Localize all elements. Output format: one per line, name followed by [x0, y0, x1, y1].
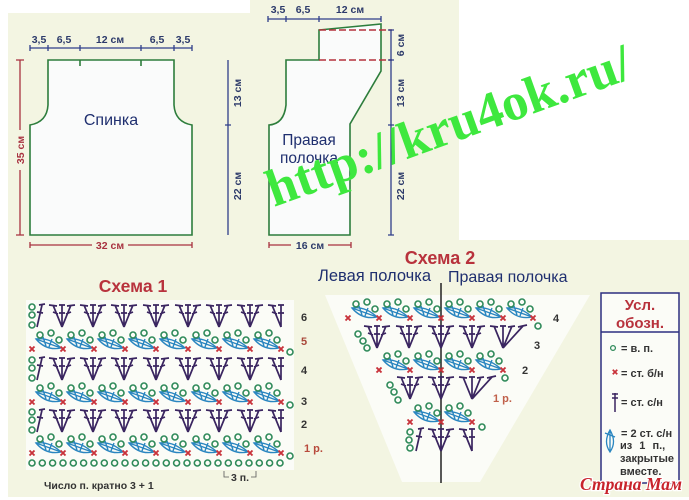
schema 1 title: Схема 1: [99, 276, 168, 296]
legend box: [601, 293, 679, 483]
row numbers: 1 р.: [493, 393, 512, 405]
multiple note: Число п. кратно 3 + 1: [44, 480, 154, 492]
row numbers: 6: [301, 312, 307, 324]
watermark: site name: Страна Мам: [580, 474, 682, 494]
middle height dimension: [225, 60, 244, 235]
legend: double crochet: = ст. с/н: [621, 397, 663, 409]
white backing: schema 1: [26, 300, 294, 470]
repeat bracket: [224, 471, 256, 484]
middle height dimension: 13 см: [232, 79, 244, 107]
back top dimensions: 3,5: [32, 34, 46, 46]
legend: cluster: [605, 428, 674, 478]
legend: cluster: из 1 п.,: [620, 440, 665, 452]
front top dimensions: [268, 4, 381, 22]
panel: right front pattern: [225, 4, 407, 252]
legend: cluster: закрытые: [620, 453, 674, 465]
legend: cluster: вместе.: [620, 466, 661, 478]
centre line: [440, 283, 442, 483]
back width dimension: 32 см: [96, 240, 124, 252]
white backing: schema 2: [325, 295, 590, 482]
front width dimension: [269, 240, 351, 252]
row 4 stitches: [29, 357, 284, 381]
row numbers: 4: [301, 365, 308, 377]
front height dimension: 13 см: [395, 79, 407, 107]
front outline: [269, 24, 381, 235]
back outline: [30, 60, 192, 235]
back label: Спинка: [84, 112, 138, 129]
back top dimensions: [30, 34, 192, 51]
row numbers: 2: [301, 419, 307, 431]
front height dimension: 6 см: [395, 34, 407, 56]
panel: back pattern: [15, 34, 192, 252]
repeat bracket: 3 п.: [231, 472, 249, 484]
back height dimension: 35 см: [15, 136, 27, 164]
front height dimension: [388, 30, 407, 235]
foundation chain: [29, 460, 283, 466]
row numbers: [493, 313, 560, 405]
front top dimensions: 3,5: [271, 4, 285, 16]
row numbers: 5: [301, 336, 307, 348]
front width dimension: 16 см: [296, 240, 324, 252]
watermark: url: http://kru4ok.ru/: [258, 33, 640, 218]
left front heading: Левая полочка: [318, 267, 432, 285]
panel: legend: [601, 293, 679, 483]
legend: cluster: = 2 ст. с/н: [621, 428, 672, 440]
row 5 stitches: [30, 330, 293, 355]
legend title: Усл.: [625, 297, 655, 314]
front top dimensions: 12 см: [336, 4, 364, 16]
row 1 stitches: [30, 434, 293, 459]
front label line 2: полочка: [280, 150, 338, 167]
middle height dimension: 22 см: [232, 172, 244, 200]
legend title line 2: обозн.: [616, 315, 664, 332]
row numbers: 4: [553, 313, 560, 325]
row numbers: 1 р.: [304, 443, 323, 455]
front height dimension: 22 см: [395, 172, 407, 200]
red dashed lines: [319, 30, 392, 60]
row 2 stitches: [29, 409, 284, 433]
back top dimensions: 6,5: [150, 34, 164, 46]
row numbers: [301, 312, 323, 455]
front label: Правая: [282, 132, 336, 149]
row numbers: 2: [522, 365, 528, 377]
legend: double crochet: [612, 393, 663, 412]
schema 2 title: Схема 2: [405, 248, 475, 268]
row 6 stitches: [29, 304, 284, 328]
row 4: [346, 299, 541, 329]
back width dimension: [30, 240, 192, 252]
back top dimensions: 12 см: [96, 34, 124, 46]
back top dimensions: 6,5: [57, 34, 71, 46]
lower stitch row: [406, 428, 475, 451]
legend: chain: = в. п.: [621, 343, 653, 355]
row 3: [355, 325, 527, 351]
row 3 stitches: [30, 383, 293, 408]
right front heading: Правая полочка: [448, 269, 568, 286]
panel: schema 1: [29, 276, 323, 492]
lower fan row: [408, 403, 485, 430]
legend: single crochet: = ст. б/н: [621, 368, 664, 380]
row 1: [387, 376, 496, 403]
back top dimensions: 3,5: [176, 34, 190, 46]
panel: schema 2: [318, 248, 568, 483]
back neck marks: [80, 60, 141, 66]
row numbers: 3: [301, 396, 307, 408]
row numbers: 3: [534, 340, 540, 352]
front top dimensions: 6,5: [296, 4, 310, 16]
row 2: [376, 351, 508, 381]
back height dimension: [15, 60, 27, 235]
